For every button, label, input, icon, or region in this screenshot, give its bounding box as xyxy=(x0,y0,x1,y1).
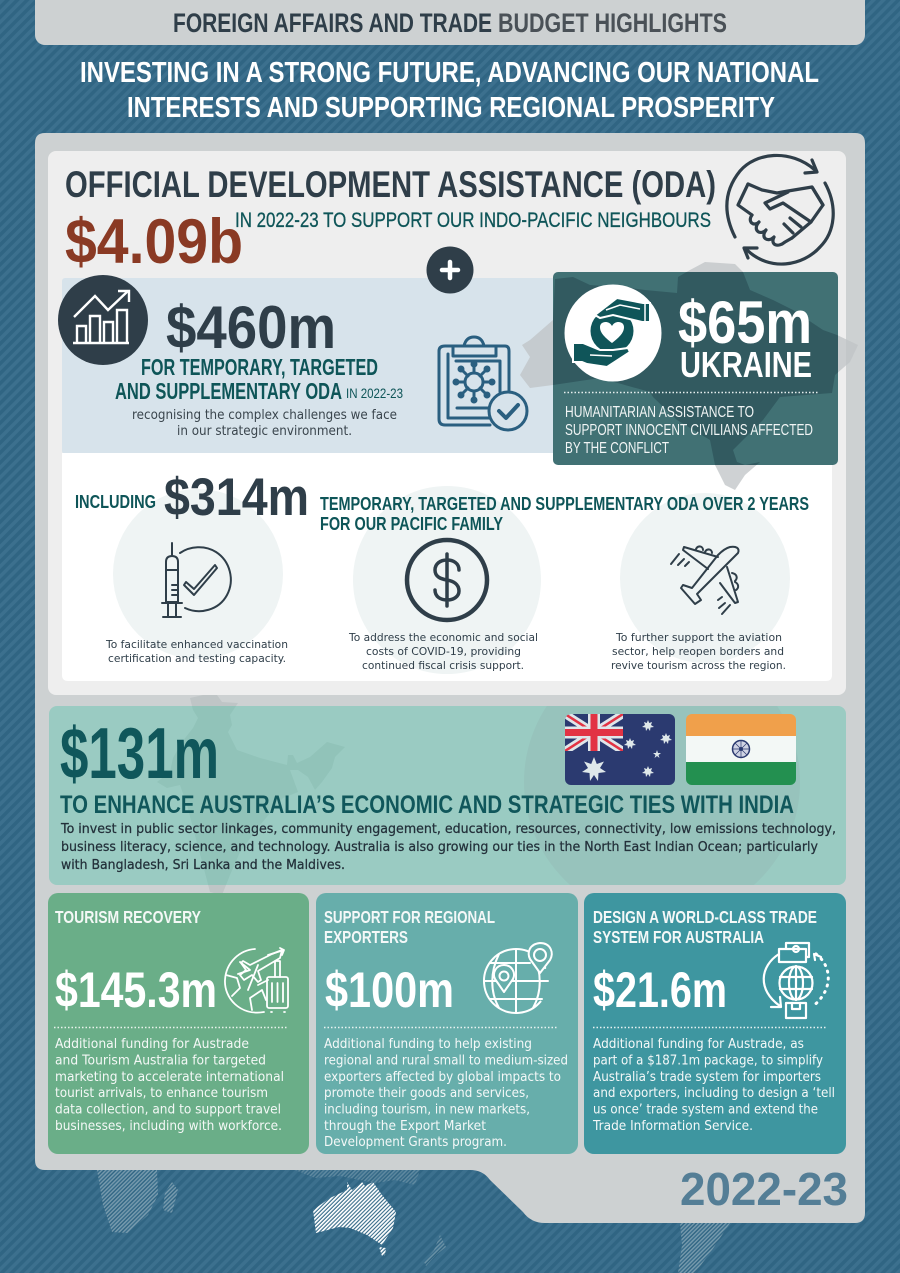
Ukraine description: SUPPORT INNOCENT CIVILIANS AFFECTED xyxy=(565,422,813,439)
India description: with Bangladesh, Sri Lanka and the Maldives. xyxy=(61,858,345,873)
amount: $21.6m xyxy=(593,962,727,1018)
icon: clipboard virus xyxy=(439,337,527,430)
card description: Additional funding to help existing xyxy=(324,1036,532,1052)
temporary ODA text: in our strategic environment. xyxy=(177,424,352,439)
card description: regional and rural small to medium-sized xyxy=(324,1052,568,1068)
caption: vaccination: certification and testing capacity. xyxy=(108,652,286,665)
caption: vaccination: To facilitate enhanced vaccination xyxy=(105,638,288,651)
Ukraine label: UKRAINE xyxy=(680,344,812,385)
card description: and Tourism Australia for targeted xyxy=(55,1052,266,1068)
ODA amount: $4.09b xyxy=(65,207,243,277)
icon: dollar coin xyxy=(407,540,487,620)
panel: regional exporters xyxy=(316,893,578,1154)
amount: $145.3m xyxy=(55,962,217,1018)
amount: 314m: $314m xyxy=(164,468,309,527)
caption: aviation xyxy=(611,631,786,672)
Pacific family heading: FOR OUR PACIFIC FAMILY xyxy=(320,514,503,534)
card description: tourist arrivals, to enhance tourism xyxy=(55,1085,268,1101)
icon: syringe and check xyxy=(162,543,231,617)
card heading: SUPPORT FOR REGIONAL xyxy=(324,907,495,927)
main title xyxy=(80,57,819,124)
year label: 2022-23 xyxy=(680,1163,848,1215)
card description: Development Grants program. xyxy=(324,1134,507,1150)
panel: India xyxy=(49,706,846,885)
card description: Trade Information Service. xyxy=(592,1118,753,1134)
icon: globe with pins xyxy=(471,936,561,1026)
card heading: EXPORTERS xyxy=(324,927,408,947)
caption: aviation: To further support the aviation xyxy=(615,631,782,644)
Ukraine description: BY THE CONFLICT xyxy=(565,440,669,457)
India description: To invest in public sector linkages, community engagement, education, resources, connectivity, low emissions technology, xyxy=(60,822,836,837)
card description: marketing to accelerate international xyxy=(55,1069,284,1085)
caption: economic costs: costs of COVID-19, providing xyxy=(366,645,521,658)
card description: us once’ trade system and extend the xyxy=(593,1102,818,1118)
header bar: BUDGET HIGHLIGHTS xyxy=(498,8,727,38)
main title: INTERESTS AND SUPPORTING REGIONAL PROSPERITY xyxy=(127,92,775,124)
card heading: SYSTEM FOR AUSTRALIA xyxy=(593,927,764,947)
icon: global trade cycle xyxy=(764,943,828,1018)
ODA subheading: IN 2022-23 TO SUPPORT OUR INDO-PACIFIC NEIGHBOURS xyxy=(235,209,711,232)
header bar: FOREIGN AFFAIRS AND TRADE xyxy=(173,8,492,38)
India description xyxy=(60,822,836,873)
card description: Additional funding for Austrade, as xyxy=(593,1036,804,1052)
panel: trade system xyxy=(584,893,846,1154)
divider xyxy=(564,392,818,394)
card description: and exporters, including to design a ‘tell xyxy=(593,1085,835,1101)
panel: Ukraine xyxy=(553,272,838,465)
card description: Australia’s trade system for importers xyxy=(593,1069,821,1085)
flag: India xyxy=(686,714,796,785)
icon: handshake xyxy=(727,155,833,264)
plus badge xyxy=(426,246,474,294)
Ukraine description xyxy=(565,404,813,457)
including label: INCLUDING xyxy=(75,492,156,512)
caption: aviation: sector, help reopen borders and xyxy=(612,645,784,658)
India description: business literacy, science, and technology. Australia is also growing our ties in the North East Indian Ocean; particularly xyxy=(61,840,818,855)
temporary ODA text xyxy=(115,354,403,439)
card heading: DESIGN A WORLD-CLASS TRADE xyxy=(593,907,817,927)
card description: promote their goods and services, xyxy=(324,1085,529,1101)
caption: economic costs xyxy=(348,631,538,672)
icon: caring hands xyxy=(564,284,662,382)
divider xyxy=(54,1026,288,1028)
card description: including tourism, in new markets, xyxy=(324,1102,530,1118)
circle backdrops xyxy=(113,486,790,674)
card description xyxy=(592,1036,835,1134)
card description: Additional funding for Austrade xyxy=(55,1036,249,1052)
amount: $100m xyxy=(325,962,454,1018)
icon: growth chart xyxy=(58,275,148,365)
panel: ODA xyxy=(48,151,858,695)
world map: Australia and neighbours xyxy=(97,1170,730,1273)
header bar xyxy=(35,0,865,45)
ODA heading: OFFICIAL DEVELOPMENT ASSISTANCE (ODA) xyxy=(65,164,716,205)
Ukraine description: HUMANITARIAN ASSISTANCE TO xyxy=(565,404,754,421)
amount: 131m: $131m xyxy=(60,714,219,794)
flag: Australia xyxy=(565,714,675,785)
caption: aviation: revive tourism across the region. xyxy=(611,659,786,672)
icon: airplane xyxy=(671,546,739,614)
caption: vaccination xyxy=(105,638,288,665)
map: Ukraine xyxy=(520,262,858,490)
caption: economic costs: continued fiscal crisis support. xyxy=(362,659,524,672)
Pacific family heading xyxy=(320,494,809,534)
card description xyxy=(55,1036,284,1134)
card description: part of a $187.1m package, to simplify xyxy=(593,1052,823,1068)
divider xyxy=(593,1026,827,1028)
temporary ODA text: AND SUPPLEMENTARY ODA xyxy=(115,378,342,404)
card heading xyxy=(593,907,817,947)
icon: globe plane suitcase xyxy=(225,948,288,1013)
panel: tourism recovery xyxy=(48,893,309,1154)
amount: 460m: $460m xyxy=(166,294,336,361)
main grey panel xyxy=(35,133,865,1223)
map: India silhouette xyxy=(157,695,345,895)
temporary ODA text: FOR TEMPORARY, TARGETED xyxy=(141,354,378,380)
amount: 65m: $65m xyxy=(678,289,812,356)
divider xyxy=(324,1026,558,1028)
panel: white lower xyxy=(62,453,832,681)
card description: businesses, including with workforce. xyxy=(55,1118,282,1134)
card description: data collection, and to support travel xyxy=(55,1102,281,1118)
card heading: TOURISM RECOVERY xyxy=(55,907,201,927)
card description xyxy=(324,1036,568,1150)
card description: through the Export Market xyxy=(324,1118,486,1134)
card heading xyxy=(324,907,495,947)
temporary ODA text: IN 2022-23 xyxy=(346,385,403,401)
panel: temporary ODA background xyxy=(62,278,562,454)
caption: economic costs: To address the economic and social xyxy=(348,631,538,644)
temporary ODA text: recognising the complex challenges we face xyxy=(132,408,397,423)
card description: exporters affected by global impacts to xyxy=(324,1069,561,1085)
